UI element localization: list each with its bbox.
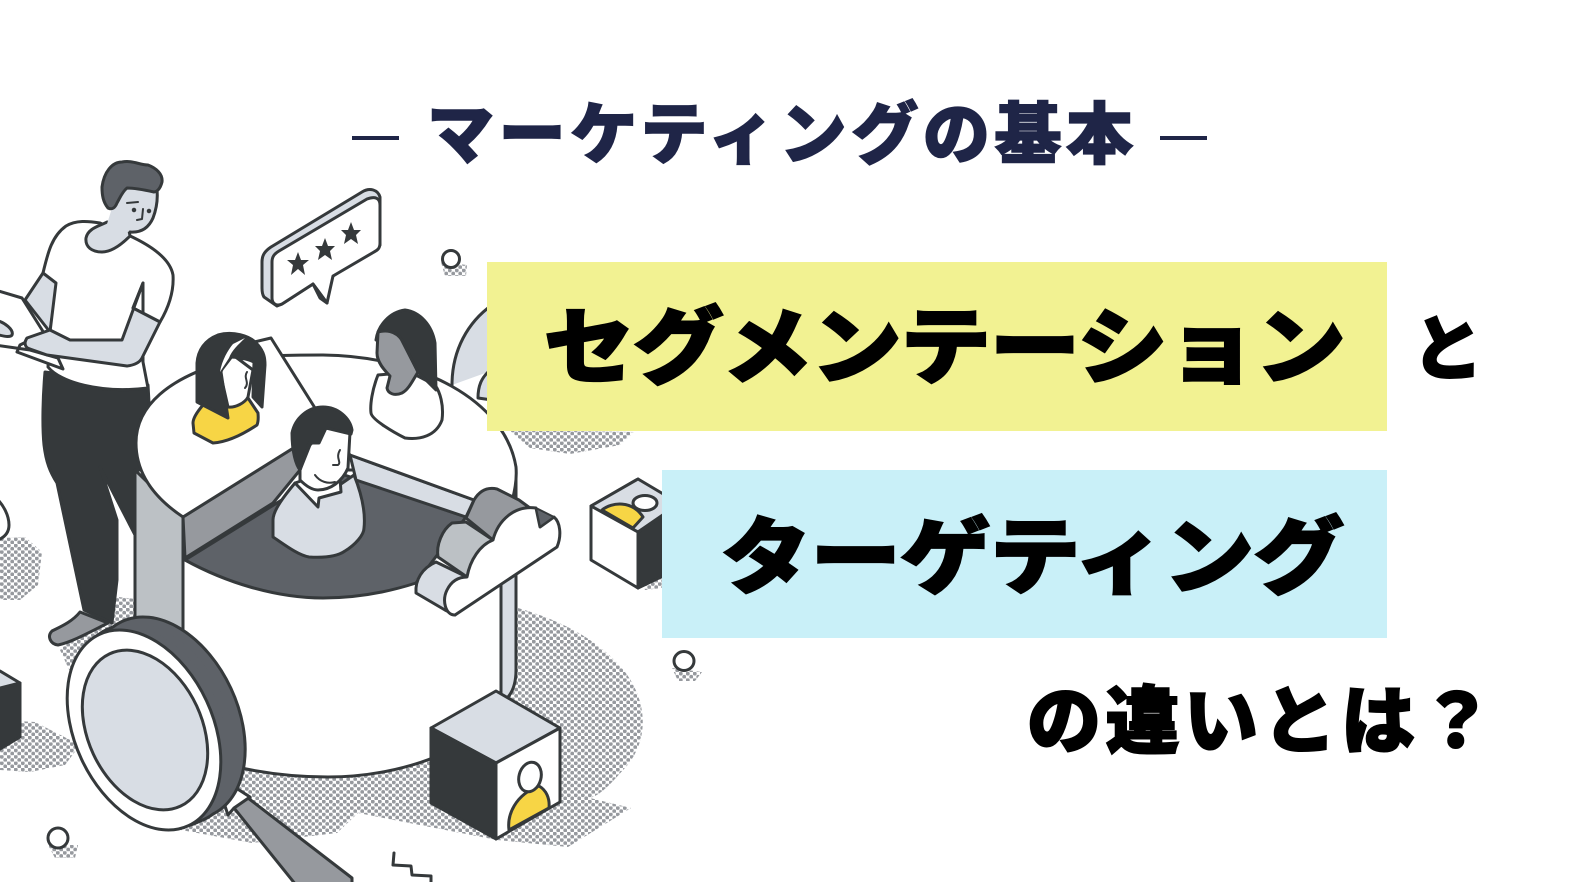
person: woman with yellow top <box>193 333 265 443</box>
face <box>107 186 157 232</box>
left edge object <box>0 497 9 541</box>
text: no chigai towa: の違いとは？ <box>1027 680 1498 763</box>
cylinder body <box>135 470 516 777</box>
right column <box>501 560 516 700</box>
heading: segmentation: セグメンテーション <box>544 303 1345 395</box>
panel: yellow highlight <box>487 262 1387 431</box>
person: man with tablet <box>0 162 173 645</box>
forearm <box>25 283 160 366</box>
small circle markers <box>48 250 694 848</box>
wedge right face <box>350 455 474 517</box>
icon: cloud <box>416 488 560 615</box>
icon: large user cube <box>431 691 560 839</box>
icon: small user cube <box>591 479 670 588</box>
facial features <box>127 202 143 220</box>
left column <box>135 470 183 655</box>
wedge left face <box>183 447 300 558</box>
shirt <box>43 221 173 390</box>
wedge floor <box>185 470 466 598</box>
shoe <box>50 612 108 645</box>
table top <box>136 355 516 517</box>
hand on tablet <box>0 320 12 337</box>
left arm <box>25 273 57 332</box>
icon: edge cube <box>0 671 20 752</box>
back arch behind table <box>452 305 492 400</box>
title dash left <box>352 136 399 140</box>
tablet <box>0 290 63 369</box>
title: マーケティングの基本 <box>427 98 1138 173</box>
text: and: と <box>1412 311 1483 390</box>
icon: magnifying glass <box>37 594 352 882</box>
person: woman with white top <box>371 310 443 438</box>
panel: blue highlight <box>662 470 1387 638</box>
title dash right <box>1160 136 1207 140</box>
icon: speech bubble with stars <box>262 190 380 306</box>
pants <box>43 372 150 623</box>
hair <box>102 162 162 209</box>
neck and collar <box>86 222 130 252</box>
person: man in collar shirt <box>273 407 364 557</box>
icon: zigzag <box>393 853 431 882</box>
raised slice <box>240 338 315 440</box>
heading: targeting: ターゲティング <box>721 513 1344 605</box>
halftone floor shadows <box>0 262 702 858</box>
